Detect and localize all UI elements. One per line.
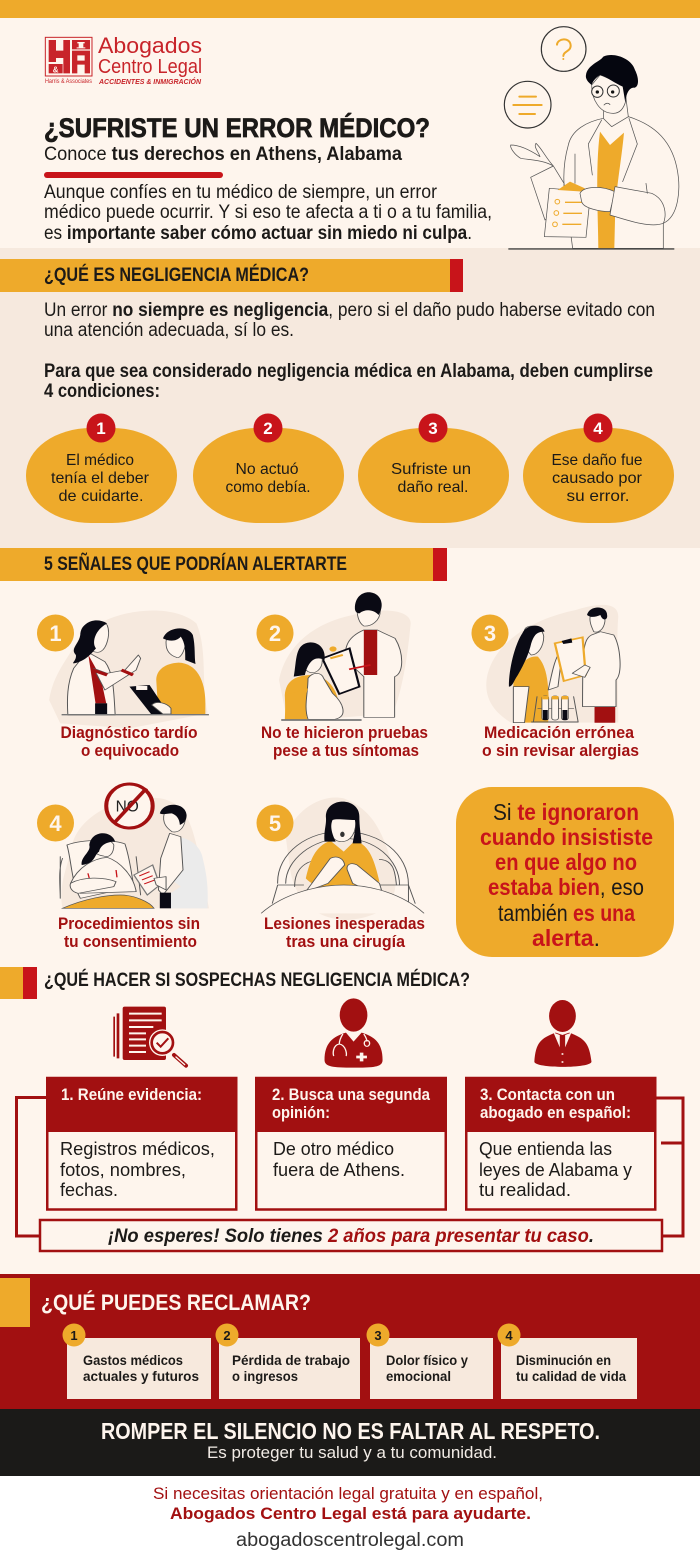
condition 3: Sufriste un xyxy=(391,461,471,478)
claim card 4: 4 xyxy=(505,1328,513,1343)
signal 3 caption: o sin revisar alergias xyxy=(482,742,639,760)
step card 3: leyes de Alabama y xyxy=(479,1160,632,1180)
signal 3 caption: Medicación errónea xyxy=(484,724,635,742)
callout: te ignoraron: estaba bien, eso xyxy=(488,874,644,900)
step card 2 xyxy=(255,1077,447,1210)
no sign xyxy=(106,784,153,828)
text: definition xyxy=(44,300,655,341)
condition 4: su error. xyxy=(566,488,630,505)
panel: que puedes reclamar xyxy=(0,1274,700,1409)
intro text: Aunque confíes en tu médico de siempre, un error xyxy=(44,182,438,203)
illustration: doctor with clipboard xyxy=(504,27,679,249)
callout: te ignoraron: Si te ignoraron xyxy=(493,799,639,825)
heading: que es negligencia: ¿QUÉ ES NEGLIGENCIA MÉDICA? xyxy=(44,264,309,286)
claim card 1: Gastos médicos xyxy=(83,1352,183,1368)
number badge 4: 4 xyxy=(49,811,62,836)
text: conditions xyxy=(44,361,653,402)
number badge 2 xyxy=(256,614,294,652)
icon: doctor xyxy=(325,998,383,1068)
panel: romper el silencio: Es proteger tu salud y a tu comunidad. xyxy=(207,1443,497,1462)
text: definition: Un error no siempre es negligencia, pero si el daño pudo haberse evitado con xyxy=(44,300,655,321)
callout: te ignoraron: alerta. xyxy=(532,925,600,951)
step card 3: abogado en español: xyxy=(480,1104,631,1122)
number badge 1: 1 xyxy=(49,621,62,646)
intro text: es importante saber cómo actuar sin miedo ni culpa. xyxy=(44,223,472,244)
panel: footer: Si necesitas orientación legal gratuita y en español, xyxy=(153,1484,543,1503)
condition 1: 1 xyxy=(96,419,106,438)
heading: que es negligencia xyxy=(0,259,463,292)
step card 2: opinión: xyxy=(272,1104,330,1122)
intro text: médico puede ocurrir. Y si eso te afecta a ti o a tu familia, xyxy=(44,202,492,223)
heading: 5 senales: 5 SEÑALES QUE PODRÍAN ALERTARTE xyxy=(44,553,347,575)
bracket connectors xyxy=(16,1098,683,1236)
condition 3: 3 xyxy=(428,419,438,438)
text: definition: una atención adecuada, sí lo es. xyxy=(44,320,294,341)
condition 1: de cuidarte. xyxy=(58,488,144,505)
logo xyxy=(45,33,202,86)
signal 2 caption: No te hicieron pruebas xyxy=(261,724,428,742)
panel: romper el silencio xyxy=(0,1409,700,1476)
logo: ACCIDENTES & INMIGRACIÓN xyxy=(98,77,202,86)
red divider xyxy=(44,172,223,178)
step card 3: tu realidad. xyxy=(479,1180,571,1200)
condition 4: causado por xyxy=(552,470,643,487)
claim card 3: emocional xyxy=(386,1368,451,1384)
number badge 4 xyxy=(37,804,74,842)
claim card 4 xyxy=(498,1324,637,1399)
claim card 3: Dolor físico y xyxy=(386,1352,468,1368)
panel: que puedes reclamar: ¿QUÉ PUEDES RECLAMAR? xyxy=(41,1290,311,1315)
icon: document with magnifier xyxy=(113,1007,186,1066)
claim card 4: tu calidad de vida xyxy=(516,1368,626,1384)
deadline banner xyxy=(40,1220,662,1251)
number badge 2: 2 xyxy=(269,621,281,646)
claim card 2: Pérdida de trabajo xyxy=(232,1352,350,1368)
signal 4 caption xyxy=(58,915,200,951)
condition 1: El médico xyxy=(66,452,134,469)
step card 3: 3. Contacta con un xyxy=(480,1086,615,1104)
step card 2: De otro médico xyxy=(273,1139,394,1159)
icon: lawyer xyxy=(534,1000,591,1067)
claim card 4: Disminución en xyxy=(516,1352,611,1368)
step card 1: fechas. xyxy=(60,1180,118,1200)
condition 4 xyxy=(523,414,674,523)
no sign: NO xyxy=(116,798,139,816)
step card 2: fuera de Athens. xyxy=(273,1160,405,1180)
number badge 5 xyxy=(256,804,294,842)
condition 2 xyxy=(193,414,344,523)
claim card 1: 1 xyxy=(70,1328,78,1343)
signal 2 caption: pese a tus síntomas xyxy=(273,742,419,760)
callout: te ignoraron: en que algo no xyxy=(495,849,637,875)
panel: footer xyxy=(0,1476,700,1566)
condition 3: daño real. xyxy=(398,479,468,496)
subtitle: Conoce tus derechos en Athens, Alabama xyxy=(44,144,402,165)
title: ¿SUFRISTE UN ERROR MÉDICO? xyxy=(44,113,430,143)
step card 1: fotos, nombres, xyxy=(60,1160,186,1180)
callout: te ignoraron xyxy=(456,787,674,957)
number badge 1 xyxy=(37,614,74,652)
claim card 2: 2 xyxy=(223,1328,231,1343)
signal 2 caption xyxy=(261,724,428,760)
panel: footer: Abogados Centro Legal está para ayudarte. xyxy=(170,1505,531,1523)
condition 3 xyxy=(358,414,509,523)
callout: te ignoraron: también es una xyxy=(498,900,635,926)
step card 3: Que entienda las xyxy=(479,1139,612,1159)
signal 4 illustration xyxy=(60,784,209,908)
intro text xyxy=(44,182,492,244)
claim card 3 xyxy=(366,1324,493,1399)
logo: & xyxy=(53,65,59,74)
logo: Abogados xyxy=(98,33,202,58)
condition 1 xyxy=(26,414,177,523)
condition 1: tenía el deber xyxy=(51,470,150,487)
signal 2 illustration xyxy=(279,592,411,720)
signal 5 caption xyxy=(264,915,425,951)
condition 4: Ese daño fue xyxy=(552,452,643,469)
logo: Centro Legal xyxy=(98,56,202,78)
text: conditions: 4 condiciones: xyxy=(44,381,160,402)
condition 2: como debía. xyxy=(226,479,310,496)
top bar xyxy=(0,0,700,18)
signal 1 caption: o equivocado xyxy=(81,742,179,760)
signal 5 caption: tras una cirugía xyxy=(286,933,406,951)
condition 2: 2 xyxy=(263,419,273,438)
signal 5 caption: Lesiones inesperadas xyxy=(264,915,425,933)
panel: romper el silencio: ROMPER EL SILENCIO NO ES FALTAR AL RESPETO. xyxy=(101,1418,600,1444)
deadline banner: ¡No esperes! Solo tienes 2 años para presentar tu caso. xyxy=(108,1226,594,1247)
signal 1 caption xyxy=(60,724,198,760)
signal 1 caption: Diagnóstico tardío xyxy=(60,724,198,742)
logo: Harris & Associates xyxy=(45,79,92,85)
claim card 1 xyxy=(62,1324,211,1399)
step card 3 xyxy=(465,1077,656,1210)
claim card 1: actuales y futuros xyxy=(83,1368,199,1384)
number badge 3: 3 xyxy=(484,621,496,646)
panel: footer: abogadoscentrolegal.com xyxy=(236,1530,464,1551)
step card 2: 2. Busca una segunda xyxy=(272,1086,431,1104)
step card 1: Registros médicos, xyxy=(60,1139,215,1159)
signal 3 illustration xyxy=(486,605,620,723)
signal 1 illustration xyxy=(49,610,209,728)
claim card 3: 3 xyxy=(374,1328,382,1343)
heading: que hacer: ¿QUÉ HACER SI SOSPECHAS NEGLIGENCIA MÉDICA? xyxy=(44,969,470,991)
number badge 3 xyxy=(472,614,508,652)
signal 3 caption xyxy=(482,724,639,760)
claim card 2: o ingresos xyxy=(232,1368,298,1384)
callout: te ignoraron: cuando insististe xyxy=(480,824,653,850)
condition 4: 4 xyxy=(593,419,603,438)
heading: que hacer xyxy=(0,967,470,999)
step card 1: 1. Reúne evidencia: xyxy=(61,1086,202,1104)
claim card 2 xyxy=(216,1324,360,1399)
signal 5 illustration xyxy=(261,797,424,920)
panel: negligencia background xyxy=(0,248,700,548)
signal 4 caption: Procedimientos sin xyxy=(58,915,200,933)
condition 2: No actuó xyxy=(236,461,299,478)
signal 4 caption: tu consentimiento xyxy=(64,933,197,951)
step card 1 xyxy=(46,1077,238,1210)
heading: 5 senales xyxy=(0,548,447,581)
number badge 5: 5 xyxy=(269,811,281,836)
